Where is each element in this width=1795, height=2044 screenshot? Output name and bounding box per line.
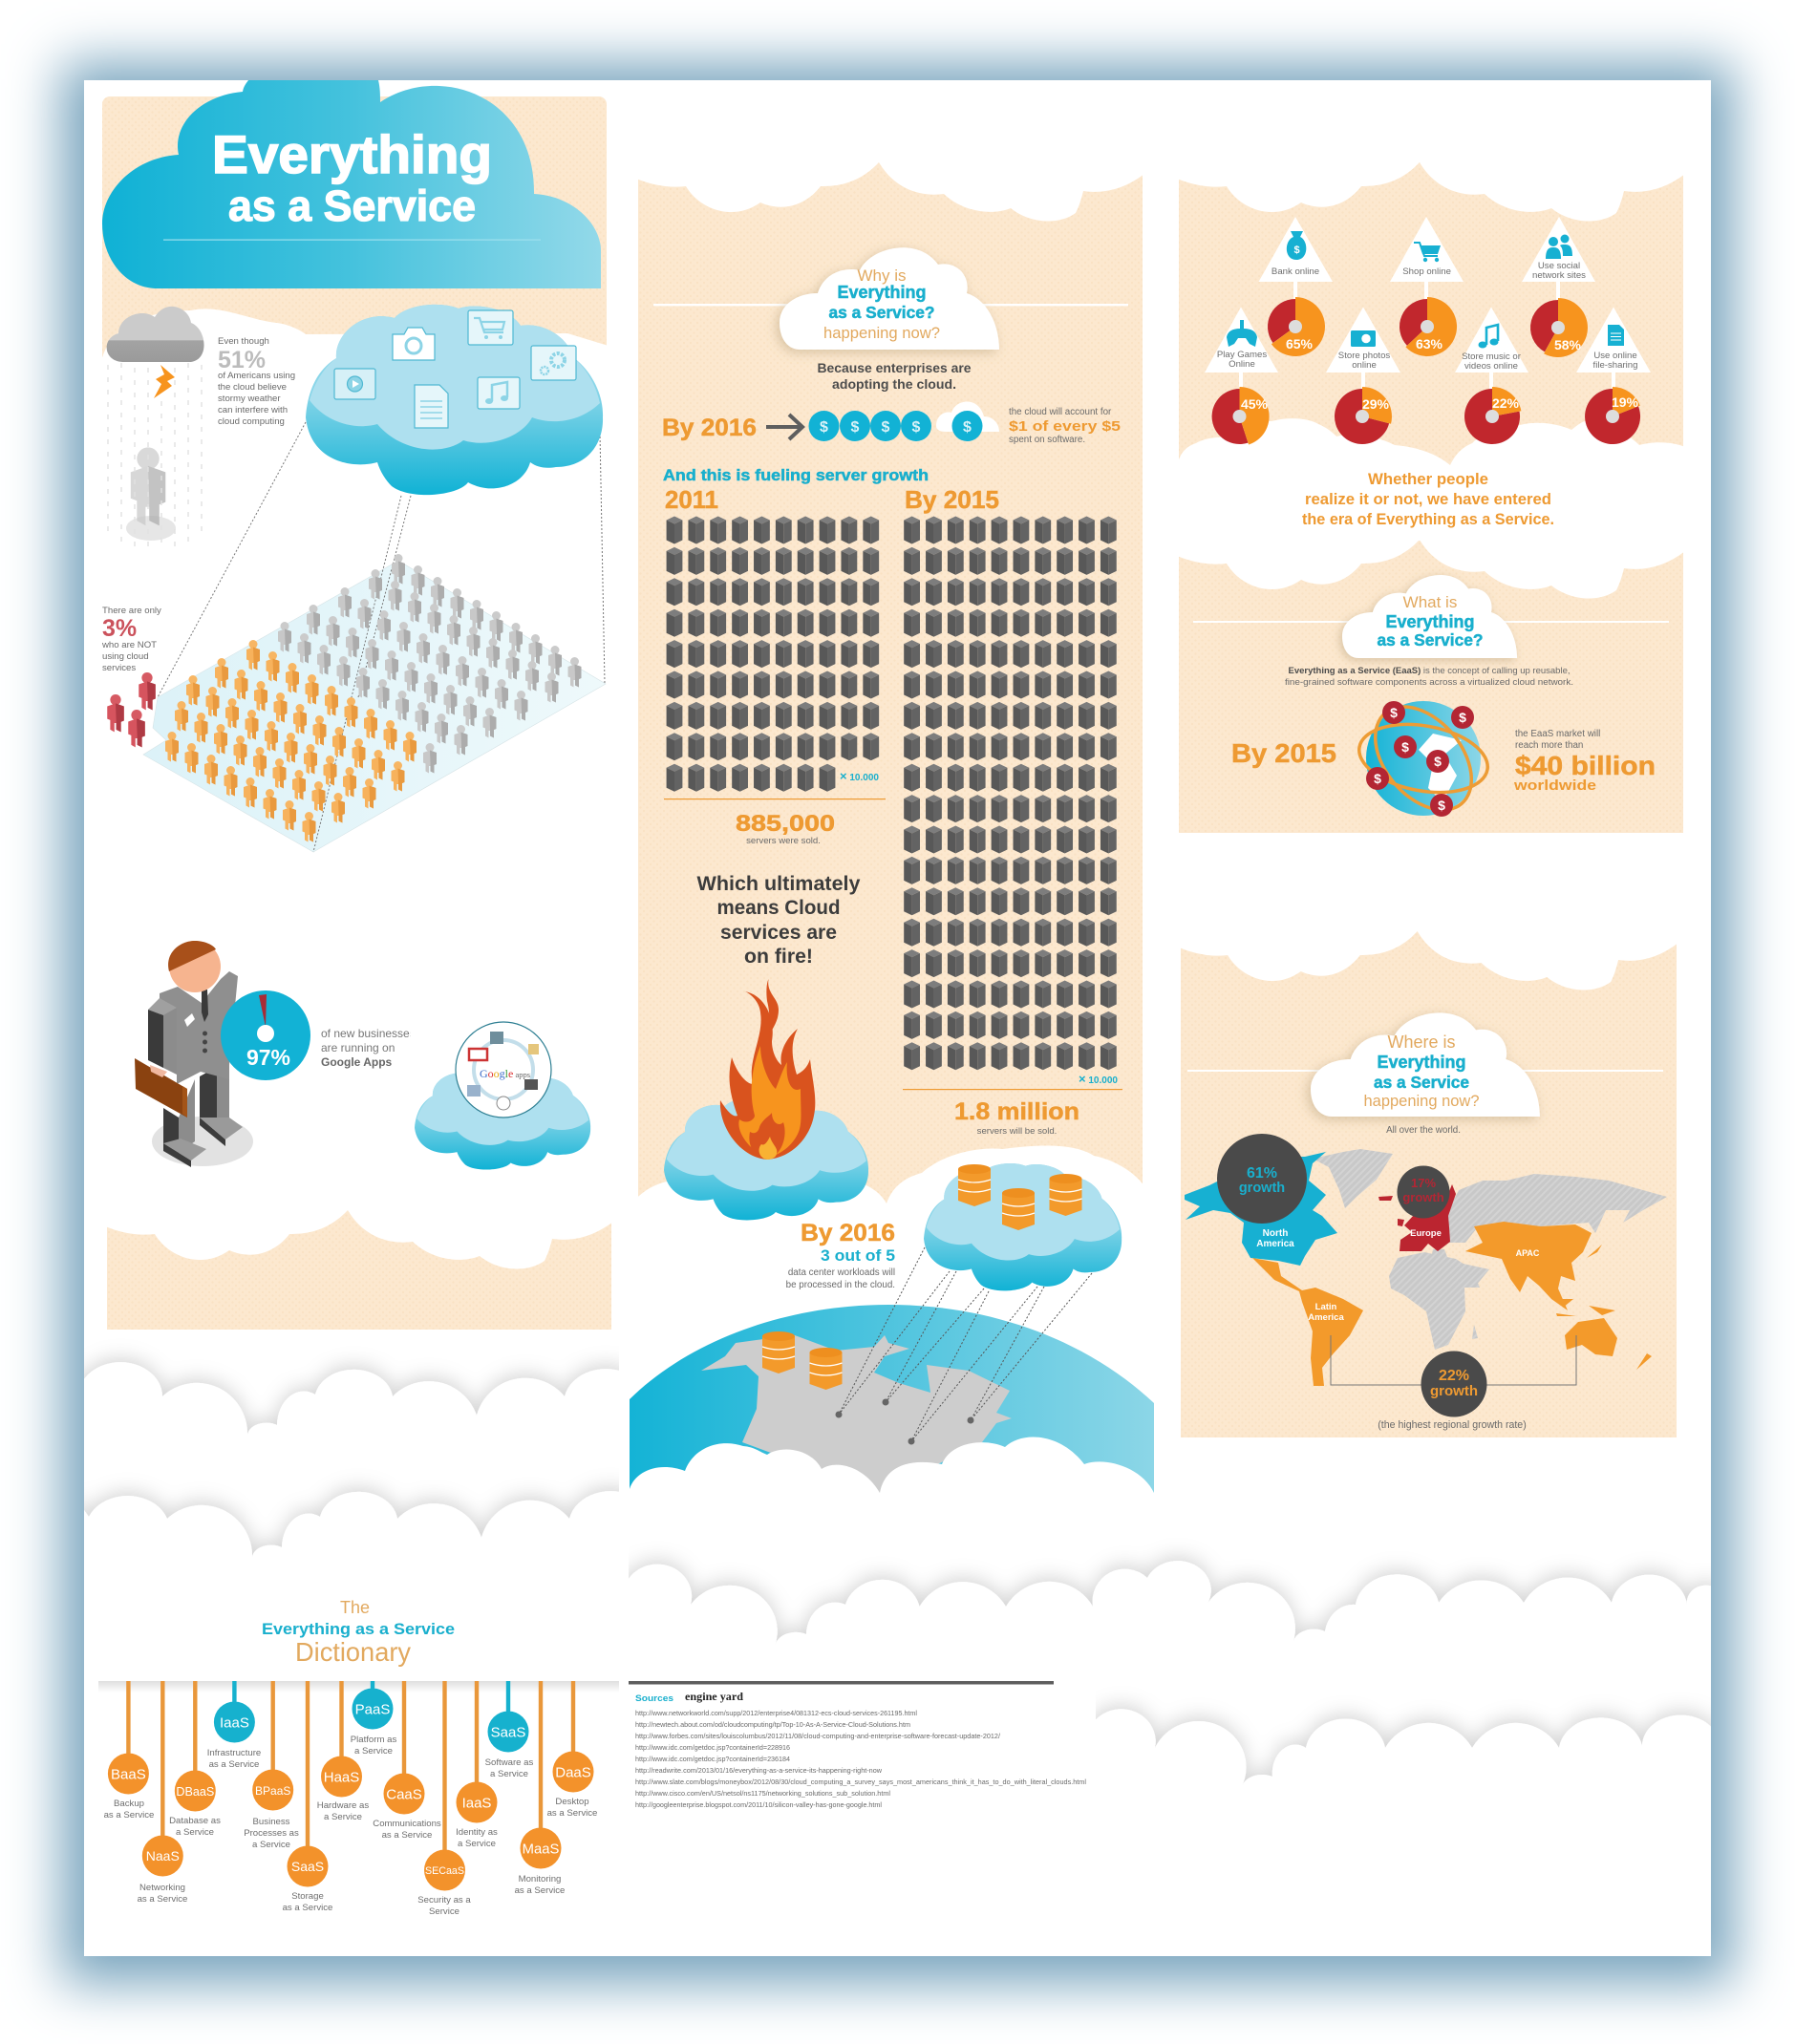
pie: music 22 percent xyxy=(1462,325,1522,444)
world map: America xyxy=(1308,1312,1344,1323)
big cloud with service icons xyxy=(306,305,603,495)
term: DBaaS xyxy=(169,1771,221,1838)
stat: 3 percent: services xyxy=(102,663,136,673)
dictionary hanging terms xyxy=(98,1681,619,1917)
term: NaaS: as a Service xyxy=(138,1894,187,1905)
term: DBaaS: Database as xyxy=(169,1816,221,1826)
text: all over the world: All over the world. xyxy=(1386,1125,1461,1136)
stat: 40 billion: reach more than xyxy=(1515,740,1583,751)
bubble: Europe 17 percent xyxy=(1397,1165,1450,1219)
globe with money orbits: $ xyxy=(1390,705,1398,720)
world map: Latin xyxy=(1315,1302,1337,1312)
heading cloud: why: Why is xyxy=(858,266,906,285)
stat: 3 percent: 3% xyxy=(102,615,137,642)
world map: America xyxy=(1256,1239,1294,1249)
term: CaaS xyxy=(373,1773,441,1841)
title text: as a Service xyxy=(228,181,476,230)
text: highest regional growth rate: (the highest regional growth rate) xyxy=(1378,1419,1527,1431)
stat: by 2016 dollar row: $1 of every $5 xyxy=(1009,418,1121,435)
globe with money orbits: $ xyxy=(1459,710,1466,725)
stat: by 2016 dollar row: $ xyxy=(963,419,972,436)
heading cloud: where: as a Service xyxy=(1374,1073,1469,1092)
term: MaaS: as a Service xyxy=(515,1885,565,1896)
sources: http://www.cisco.com/en/US/netsol/ns1175/networking_solutions_sub_solution.html xyxy=(635,1789,890,1798)
data cloud with cylinders xyxy=(924,1163,1122,1290)
chart: 2015 servers: By 2015 xyxy=(905,485,999,514)
heading: dictionary xyxy=(262,1598,455,1667)
pie: music 22 percent: videos online xyxy=(1464,361,1518,372)
pie: social networks 58 percent: network sites xyxy=(1532,270,1586,281)
term: SaaS software: a Service xyxy=(490,1769,528,1779)
sources: http://www.networkworld.com/supp/2012/enterprise4/081312-ecs-cloud-services-261195.html xyxy=(635,1709,917,1717)
world map xyxy=(1185,1149,1667,1386)
chart: 2011 servers: 2011 xyxy=(665,485,718,514)
pie: file sharing 19 percent: file-sharing xyxy=(1593,360,1637,371)
pie: bank online 65 percent: $ xyxy=(1293,245,1300,256)
text: by 2016 workloads: 3 out of 5 xyxy=(821,1246,895,1265)
pie: music 22 percent: 22% xyxy=(1492,395,1520,411)
term: MaaS xyxy=(515,1828,565,1896)
term: SECaaS: Security as a xyxy=(417,1895,471,1906)
stat: 51 percent: Even though xyxy=(218,336,269,347)
term: SaaS software: Software as xyxy=(485,1757,534,1768)
heading: dictionary: Everything as a Service xyxy=(262,1620,455,1638)
pie chart: 97 percent xyxy=(221,990,310,1080)
businessman figure xyxy=(135,941,253,1167)
isometric floor of people xyxy=(143,422,606,852)
stat: 3 percent: There are only xyxy=(102,606,161,616)
chart: 2015 servers: 1.8 million xyxy=(954,1098,1079,1125)
term: PaaS: Platform as xyxy=(351,1735,396,1745)
pie: file sharing 19 percent: 19% xyxy=(1612,394,1639,410)
white cloud edge of panel xyxy=(636,1145,1144,1242)
title text: Everything xyxy=(212,124,492,184)
cloud band 3 xyxy=(629,1550,1711,1643)
bubble: North America 61 percent xyxy=(1217,1134,1307,1224)
term: BPaaS: a Service xyxy=(252,1840,290,1850)
term: SECaaS xyxy=(417,1849,471,1917)
term: DaaS xyxy=(547,1752,597,1819)
term: BPaaS: Processes as xyxy=(244,1828,299,1839)
pie: bank online 65 percent xyxy=(1268,231,1325,356)
term: BaaS: BaaS xyxy=(111,1767,146,1782)
text: google apps stat: are running on xyxy=(321,1041,395,1054)
chart: 2015 servers: servers will be sold. xyxy=(977,1126,1057,1137)
term: DaaS: Desktop xyxy=(555,1797,589,1807)
stat: 51 percent: cloud computing xyxy=(218,416,285,427)
panel: empty peach footer xyxy=(105,1207,613,1330)
term: IaaS identity xyxy=(456,1782,498,1849)
heading cloud: where xyxy=(1311,1012,1540,1117)
stat: 40 billion: $40 billion xyxy=(1515,751,1656,780)
icon: storm cloud with rain xyxy=(107,307,204,548)
globe with money orbits xyxy=(1354,689,1493,828)
term: BaaS xyxy=(104,1754,154,1820)
sources: Sources xyxy=(635,1693,673,1704)
term: HaaS: HaaS xyxy=(324,1769,359,1786)
pie: photos 29 percent xyxy=(1335,330,1392,444)
stat: 40 billion xyxy=(1513,729,1656,794)
term: SECaaS: SECaaS xyxy=(425,1865,464,1877)
stat: by 2016 dollar row xyxy=(662,401,1121,445)
stat: by 2016 dollar row: the cloud will account for xyxy=(1009,407,1112,417)
globe with money orbits: $ xyxy=(1434,754,1442,769)
stat: 51 percent: 51% xyxy=(218,347,266,373)
pie: shop online 63 percent: Shop online xyxy=(1402,266,1451,277)
pie: photos 29 percent: online xyxy=(1352,360,1377,371)
stat: 40 billion: worldwide xyxy=(1513,777,1596,794)
term: IaaS identity: a Service xyxy=(458,1839,496,1849)
bubble: 22 percent growth: growth xyxy=(1430,1383,1478,1399)
pie chart: 97 percent: 97% xyxy=(246,1045,290,1070)
bubble: North America 61 percent: 61% xyxy=(1247,1165,1277,1182)
google apps cloud xyxy=(415,1022,590,1170)
panel: title and cloud users xyxy=(100,80,609,852)
pie: photos 29 percent: Store photos xyxy=(1338,351,1390,361)
heading cloud: what is: What is xyxy=(1403,593,1457,611)
stat: 3 percent xyxy=(101,606,161,673)
chart: 2011 servers: servers were sold. xyxy=(746,836,821,846)
pie: bank online 65 percent: 65% xyxy=(1286,336,1314,351)
globe with money orbits: $ xyxy=(1401,739,1409,755)
heading cloud: why: happening now? xyxy=(823,324,940,342)
term: CaaS: as a Service xyxy=(382,1830,432,1841)
icon: cart xyxy=(468,310,513,345)
sources: http://www.slate.com/blogs/moneybox/2012/08/30/cloud_computing_a_survey_says_most_americans_think_it_has_to_do_with_literal_clouds.html xyxy=(635,1778,1086,1786)
cloud band 1 xyxy=(84,1351,619,1434)
globe with money orbits: $ xyxy=(1438,798,1445,813)
text: by 2016 workloads: By 2016 xyxy=(801,1220,895,1246)
pie: games 45 percent: 45% xyxy=(1241,396,1269,412)
text: whether people: realize it or not, we have entered xyxy=(1305,491,1551,508)
red people not using cloud xyxy=(107,672,156,747)
text: EaaS definition: Everything as a Service (EaaS) is the concept of calling up reusable, xyxy=(1288,665,1571,675)
chart: 2015 servers xyxy=(903,485,1122,1137)
globe with money orbits: $ xyxy=(1374,771,1381,786)
pie: games 45 percent: Play Games xyxy=(1217,350,1267,360)
term: SaaS storage: SaaS xyxy=(291,1859,324,1874)
pie: games 45 percent xyxy=(1212,320,1270,445)
term: IaaS identity: Identity as xyxy=(456,1827,498,1838)
term: BaaS: Backup xyxy=(114,1799,144,1809)
term: DaaS: as a Service xyxy=(547,1808,597,1819)
panel: why is everything as a service happening now xyxy=(628,160,1156,1496)
bubble: Europe 17 percent: 17% xyxy=(1411,1176,1436,1190)
sources: http://readwrite.com/2013/01/16/everything-as-a-service-its-happening-right-now xyxy=(635,1766,883,1775)
heading: dictionary: Dictionary xyxy=(295,1637,411,1667)
pie: social networks 58 percent: 58% xyxy=(1554,337,1582,352)
term: MaaS: Monitoring xyxy=(519,1874,561,1884)
term: HaaS xyxy=(317,1756,369,1822)
world map: Europe xyxy=(1410,1228,1442,1239)
stat: 51 percent: the cloud believe xyxy=(218,382,287,393)
icon: gears xyxy=(531,346,576,380)
pie: file sharing 19 percent: Use online xyxy=(1593,351,1637,361)
term: SaaS storage: Storage xyxy=(291,1891,324,1902)
pie: file sharing 19 percent xyxy=(1585,325,1640,444)
panel: online activities and what is EaaS xyxy=(1177,160,1685,833)
term: IaaS infrastructure: Infrastructure xyxy=(207,1748,261,1758)
icon: music xyxy=(478,377,520,409)
term: IaaS infrastructure: as a Service xyxy=(209,1759,259,1770)
term: DBaaS: a Service xyxy=(176,1827,214,1838)
term: BPaaS xyxy=(244,1769,299,1850)
chart: 2015 servers: × 10.000 xyxy=(1079,1072,1118,1086)
text: cloud services on fire: means Cloud xyxy=(716,897,841,919)
stat: by 2015 label: By 2015 xyxy=(1231,738,1336,768)
title text xyxy=(212,124,492,230)
term: BPaaS: BPaaS xyxy=(255,1784,290,1798)
pie: photos 29 percent: 29% xyxy=(1362,396,1390,412)
term: PaaS: a Service xyxy=(354,1746,393,1757)
sources: http://www.idc.com/getdoc.jsp?containerId=228916 xyxy=(635,1743,790,1752)
term: IaaS infrastructure: IaaS xyxy=(220,1715,249,1731)
chart: 2011 servers: 885,000 xyxy=(736,811,835,837)
google apps cloud: Google apps xyxy=(480,1067,530,1080)
term: IaaS infrastructure xyxy=(207,1702,261,1770)
bubble: North America 61 percent: growth xyxy=(1239,1181,1285,1196)
heading cloud: why xyxy=(780,247,999,350)
pie: bank online 65 percent: Bank online xyxy=(1271,266,1319,277)
subheading: server growth: And this is fueling server growth xyxy=(663,466,929,484)
text: whether people xyxy=(1302,471,1554,528)
heading cloud: what is: Everything xyxy=(1385,612,1475,631)
term: SaaS software xyxy=(485,1712,534,1779)
heading: dictionary: The xyxy=(340,1598,370,1617)
chart: 2011 servers: × 10.000 xyxy=(840,769,879,783)
term: BPaaS: Business xyxy=(253,1817,290,1827)
world map: APAC xyxy=(1516,1248,1540,1258)
heading cloud: why: as a Service? xyxy=(829,303,934,322)
stat: 51 percent: of Americans using xyxy=(218,371,295,381)
stat: by 2016 dollar row: $ xyxy=(912,419,921,436)
stat: by 2016 dollar row: $ xyxy=(882,419,890,436)
text: google apps stat xyxy=(321,1030,411,1068)
sources: http://googleenterprise.blogspot.com/2011/10/silicon-valley-has-gone-google.html xyxy=(635,1800,882,1809)
stat: by 2016 dollar row: $ xyxy=(851,419,860,436)
text: EaaS definition xyxy=(1285,665,1573,687)
heading cloud: what is xyxy=(1342,575,1517,658)
term: IaaS identity: IaaS xyxy=(462,1796,491,1811)
sources: http://www.forbes.com/sites/louiscolumbus/2012/11/08/cloud-computing-and-enterprise-software-forecast-update-2012/ xyxy=(635,1732,1001,1740)
term: SaaS software: SaaS xyxy=(491,1725,525,1740)
term: PaaS: PaaS xyxy=(355,1702,390,1717)
term: DaaS: DaaS xyxy=(555,1765,591,1780)
text: by 2016 workloads: data center workloads will xyxy=(788,1267,895,1278)
text: cloud services on fire: Which ultimately xyxy=(697,873,861,895)
term: HaaS: Hardware as xyxy=(317,1800,369,1811)
stat: 40 billion: the EaaS market will xyxy=(1515,729,1600,739)
stat: 3 percent: using cloud xyxy=(102,651,149,662)
stat: 51 percent: stormy weather xyxy=(218,394,281,404)
bubble: Europe 17 percent: growth xyxy=(1402,1190,1444,1204)
term: BaaS: as a Service xyxy=(104,1810,154,1820)
text: google apps stat: of new businesses xyxy=(321,1027,416,1040)
stat: 3 percent: who are NOT xyxy=(101,640,157,650)
pie: games 45 percent: Online xyxy=(1229,359,1255,370)
term: NaaS xyxy=(138,1836,187,1905)
term: NaaS: NaaS xyxy=(146,1848,180,1863)
heading cloud: what is: as a Service? xyxy=(1378,630,1483,649)
text: cloud services on fire: on fire! xyxy=(744,946,813,968)
text: by 2016 workloads xyxy=(786,1220,895,1290)
text: by 2016 workloads: be processed in the cloud. xyxy=(786,1280,895,1290)
text: cloud services on fire: services are xyxy=(720,922,837,944)
term: SaaS storage xyxy=(283,1845,332,1913)
white cloud band xyxy=(1177,418,1685,541)
pie: social networks 58 percent: Use social xyxy=(1538,261,1580,271)
title cloud xyxy=(102,80,601,288)
bubble: 22 percent growth: 22% xyxy=(1439,1368,1469,1384)
icon: flame on cloud xyxy=(664,979,868,1220)
text: EaaS definition: fine-grained software components across a virtualized cloud network. xyxy=(1285,676,1573,687)
world map: North xyxy=(1263,1228,1288,1239)
term: NaaS: Networking xyxy=(139,1883,185,1893)
pie: music 22 percent: Store music or xyxy=(1462,351,1522,362)
heading cloud: where: Everything xyxy=(1378,1053,1465,1072)
term: SaaS storage: as a Service xyxy=(283,1903,332,1913)
icon: video xyxy=(334,369,375,399)
stat: 51 percent: can interfere with xyxy=(218,405,288,415)
term: SECaaS: Service xyxy=(429,1906,459,1917)
term: HaaS: a Service xyxy=(324,1812,362,1822)
stat: 51 percent xyxy=(218,336,295,427)
heading cloud: where: Where is xyxy=(1387,1033,1456,1052)
icon: document xyxy=(415,385,448,428)
term: DBaaS: DBaaS xyxy=(176,1785,214,1799)
cloud band 2 xyxy=(84,1480,619,1556)
text: because enterprises xyxy=(818,361,972,392)
icon: camera xyxy=(393,328,435,360)
stat: by 2016 dollar row: $ xyxy=(820,419,828,436)
bubble: 22 percent growth xyxy=(1421,1351,1486,1417)
globe with datacenters xyxy=(628,1247,1156,1496)
text: because enterprises: Because enterprises are xyxy=(818,361,972,375)
panel: where is everything as a service xyxy=(1179,928,1678,1437)
text: google apps stat: Google Apps xyxy=(321,1055,393,1069)
text: whether people: Whether people xyxy=(1368,471,1488,488)
cloud band 4 xyxy=(1096,1698,1711,1784)
heading cloud: why: Everything xyxy=(837,283,927,302)
pie: social networks 58 percent xyxy=(1530,235,1588,357)
sources: engine yard xyxy=(685,1690,743,1703)
term: MaaS: MaaS xyxy=(523,1842,559,1857)
text: because enterprises: adopting the cloud. xyxy=(832,377,956,392)
term: CaaS: Communications xyxy=(373,1819,441,1829)
white triangles and stems xyxy=(1205,217,1651,392)
term: PaaS xyxy=(351,1689,396,1757)
sources: http://www.idc.com/getdoc.jsp?containerId=236184 xyxy=(635,1755,790,1763)
text: cloud services on fire xyxy=(697,873,861,968)
sources: http://newtech.about.com/od/cloudcomputing/tp/Top-10-As-A-Service-Cloud-Solutions.htm xyxy=(635,1720,910,1729)
heading cloud: where: happening now? xyxy=(1364,1092,1479,1110)
chart: 2011 servers xyxy=(664,485,886,846)
text: whether people: the era of Everything as a Service. xyxy=(1302,511,1554,528)
pie: shop online 63 percent xyxy=(1400,243,1457,356)
pie: shop online 63 percent: 63% xyxy=(1416,336,1443,351)
stat: by 2016 dollar row: spent on software. xyxy=(1009,435,1085,445)
sources xyxy=(629,1681,1086,1809)
stat: by 2016 dollar row: By 2016 xyxy=(662,415,757,441)
term: CaaS: CaaS xyxy=(386,1786,422,1803)
